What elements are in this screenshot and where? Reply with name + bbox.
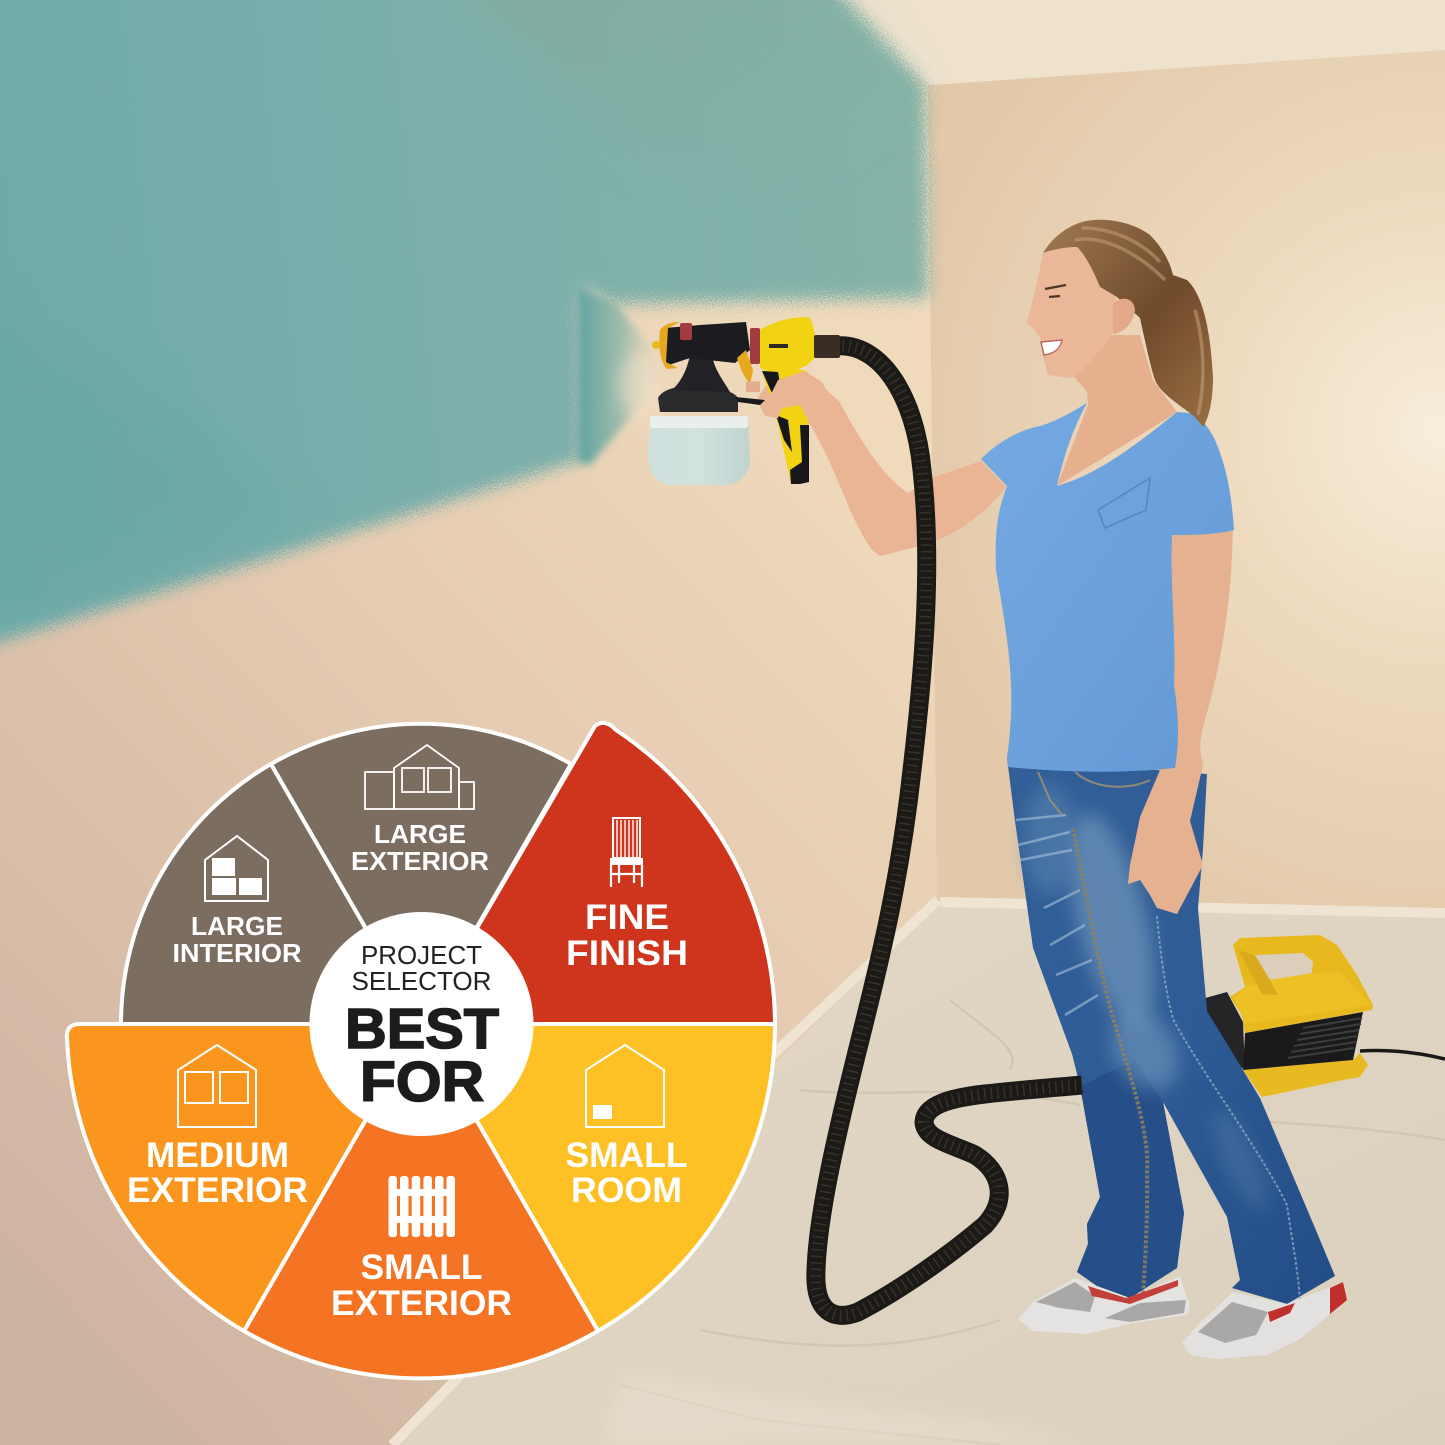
shin fade	[1202, 1103, 1278, 1217]
spray mist near nozzle	[618, 351, 662, 419]
label: EXTERIOR	[351, 846, 489, 876]
hip fade	[1024, 785, 1076, 895]
right shoe red trim	[1268, 1282, 1347, 1322]
collar	[658, 386, 738, 412]
label: LARGE	[374, 819, 466, 849]
hair highlight	[1075, 228, 1203, 415]
shaded overlap step fading into spray	[578, 288, 670, 465]
segment: large interior	[121, 764, 421, 1024]
eye and brow	[1045, 285, 1066, 297]
upper greener tone	[420, 0, 925, 240]
label: ROOM	[571, 1171, 682, 1210]
hose connector	[814, 335, 840, 358]
segment: large exterior	[271, 724, 571, 1024]
left shoe	[1018, 1276, 1190, 1334]
ear	[1113, 299, 1135, 334]
vent slats	[1288, 1018, 1362, 1058]
thigh fade	[1052, 805, 1172, 1035]
shell highlight	[1234, 972, 1371, 1024]
shirt	[981, 403, 1234, 772]
red adjuster	[680, 323, 692, 340]
pale fold patch	[600, 1372, 1100, 1445]
icon: fence	[388, 1176, 455, 1237]
right arm and hand	[1128, 525, 1233, 914]
black rear housing	[1198, 992, 1245, 1070]
black vent section	[1243, 1012, 1363, 1070]
icon: chair	[610, 818, 643, 887]
smile	[1041, 340, 1062, 355]
yellow top shell and handle	[1230, 935, 1373, 1033]
yellow trigger	[737, 350, 753, 385]
hose body	[816, 346, 1082, 1315]
center hub	[310, 912, 534, 1136]
whiskers	[1016, 815, 1098, 1015]
segment: fine finish	[421, 723, 775, 1024]
neck	[672, 337, 730, 392]
drip shield	[735, 397, 765, 405]
hub subtitle: PROJECT	[361, 940, 482, 970]
cup top band	[650, 416, 748, 428]
nozzle tip	[652, 341, 660, 349]
right wall	[928, 50, 1445, 920]
floor drop cloth	[392, 903, 1445, 1445]
power cord	[1360, 1050, 1445, 1059]
icon: medium house	[178, 1045, 256, 1127]
shirt pocket	[1098, 478, 1150, 528]
rear leg shadow	[1077, 1060, 1184, 1298]
hand over grip	[758, 371, 836, 424]
project selector wheel	[67, 723, 775, 1378]
right shoe mesh	[1198, 1302, 1268, 1343]
grip rubber	[762, 371, 809, 484]
baseboards	[392, 900, 1445, 1445]
left shoe mesh	[1036, 1282, 1186, 1322]
label: INTERIOR	[172, 938, 302, 968]
jeans	[1007, 758, 1335, 1304]
right shoe	[1182, 1282, 1347, 1359]
handle strut shadow	[1238, 950, 1278, 995]
paint spray gun	[648, 317, 840, 485]
compressor turbine	[1198, 935, 1445, 1097]
face	[1027, 247, 1117, 378]
label: LARGE	[191, 911, 283, 941]
ceiling	[800, 0, 1445, 85]
grip	[762, 366, 808, 484]
hose ribbing	[816, 346, 1082, 1315]
yellow nozzle ring	[659, 322, 680, 369]
segment: small exterior	[244, 1024, 598, 1378]
extended arm	[757, 372, 1006, 556]
yellow base	[1243, 1053, 1368, 1097]
hose	[816, 346, 1082, 1315]
ponytail and hair	[1043, 220, 1213, 427]
solid paint band	[0, 0, 928, 660]
hub subtitle: SELECTOR	[352, 966, 492, 996]
label: EXTERIOR	[127, 1171, 308, 1210]
knee fade	[1098, 999, 1192, 1101]
woman	[757, 220, 1347, 1359]
label: SMALL	[566, 1136, 688, 1175]
label: EXTERIOR	[331, 1284, 512, 1323]
finger on trigger	[746, 381, 760, 392]
hub title: FOR	[360, 1050, 484, 1114]
brand mark	[769, 344, 788, 348]
seams	[1073, 829, 1147, 1296]
segment: medium exterior	[67, 1024, 421, 1331]
icon: house with small box	[586, 1045, 664, 1127]
label: FINISH	[566, 934, 688, 973]
segment: small room	[421, 1024, 775, 1331]
yellow body	[760, 317, 815, 372]
label: MEDIUM	[146, 1136, 289, 1175]
paint cup	[648, 418, 750, 485]
label: FINE	[585, 898, 669, 937]
pocket stitching	[1038, 772, 1150, 815]
teal painted area on wall	[0, 0, 928, 660]
icon: large house	[365, 745, 474, 809]
neck and chest	[1057, 335, 1177, 486]
outer seam	[1157, 916, 1300, 1300]
left shoe red trim	[1088, 1280, 1178, 1304]
red ring	[750, 328, 760, 364]
label: SMALL	[360, 1248, 482, 1287]
icon: house with boxes	[205, 836, 268, 901]
nozzle head	[665, 322, 750, 366]
lower-left darker paint	[0, 300, 300, 620]
floor folds	[500, 1000, 1445, 1445]
left wall	[0, 0, 940, 1445]
hub title: BEST	[345, 997, 499, 1061]
handle opening	[1255, 953, 1313, 980]
